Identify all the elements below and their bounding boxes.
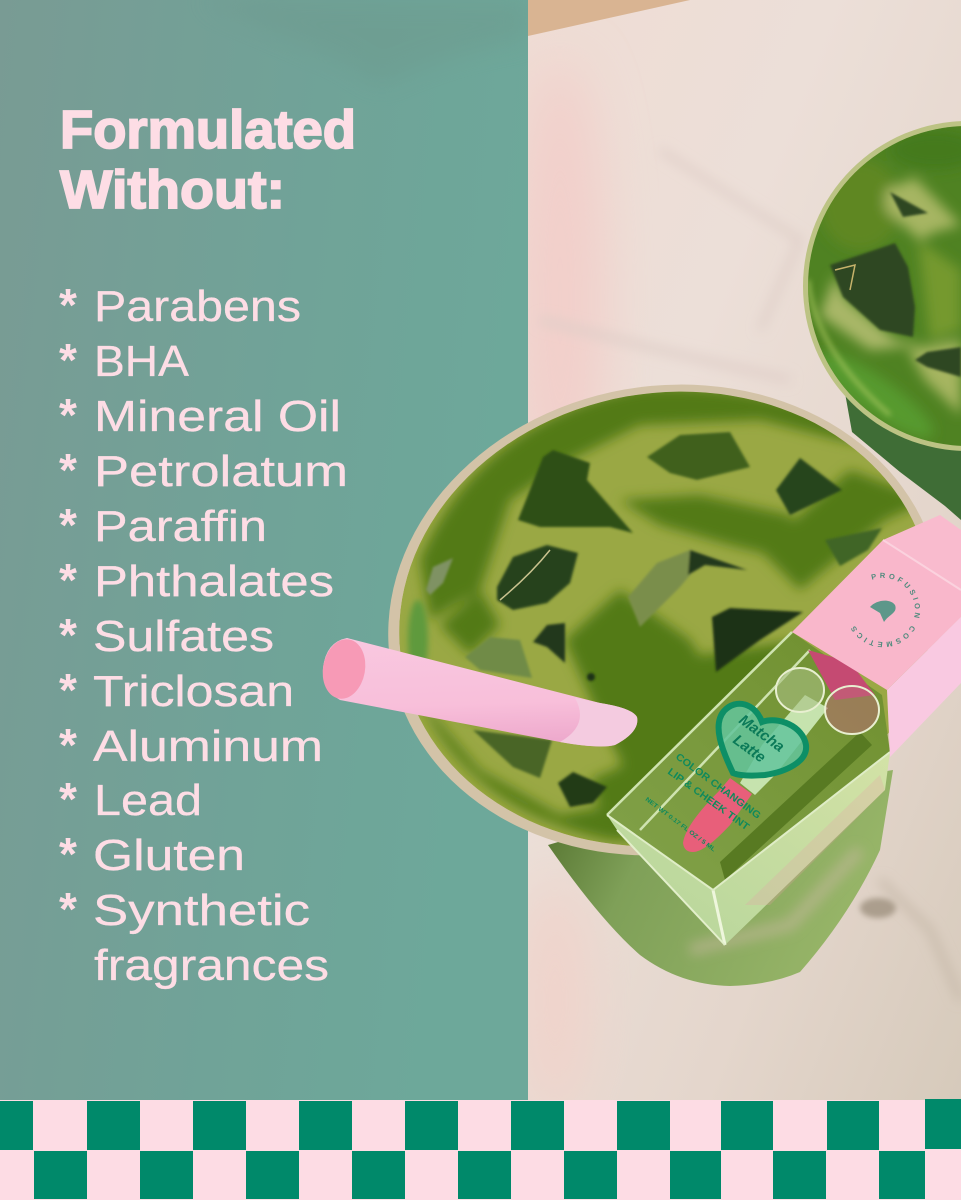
second cup rim <box>803 121 961 451</box>
product label text: LIP & CHEEK TINT <box>665 767 751 833</box>
list asterisks: * <box>59 609 77 661</box>
lip tint product <box>606 515 961 946</box>
ingredient list: Gluten <box>93 831 245 880</box>
photo: main matcha cup <box>388 384 928 986</box>
list asterisks: * <box>59 499 77 551</box>
photo: second matcha cup <box>803 121 961 520</box>
list asterisks <box>59 279 77 935</box>
cup body <box>548 770 893 986</box>
list asterisks: * <box>59 883 77 935</box>
left teal panel <box>0 0 528 1100</box>
list asterisks: * <box>59 554 77 606</box>
ingredient list: Lead <box>94 776 202 825</box>
ingredient list: Synthetic <box>93 886 310 935</box>
heart logo: Matcha <box>736 711 787 756</box>
heading <box>60 100 356 220</box>
list asterisks: * <box>59 334 77 386</box>
ingredient list: fragrances <box>94 941 329 990</box>
product label text: NET WT 0.17 FL OZ / 5 ML <box>644 797 716 854</box>
list asterisks: * <box>59 719 77 771</box>
heart logo <box>719 704 806 776</box>
second cup body <box>845 393 961 520</box>
marble table background photo <box>515 0 961 1120</box>
list asterisks: * <box>59 444 77 496</box>
wand <box>808 650 875 700</box>
glass tube <box>607 752 890 945</box>
product label text <box>644 752 763 854</box>
matcha surface <box>399 392 928 846</box>
heading: Without: <box>60 160 285 220</box>
list asterisks: * <box>59 664 77 716</box>
list asterisks: * <box>59 828 77 880</box>
list asterisks: * <box>59 389 77 441</box>
ingredient list: Aluminum <box>93 722 323 771</box>
cap badge: PROFUSION COSMETICS <box>851 572 920 648</box>
ingredient list: Phthalates <box>94 557 334 606</box>
ingredient list <box>93 282 348 990</box>
ingredient list: BHA <box>94 337 190 386</box>
cup rim <box>351 341 961 899</box>
pink straw <box>318 636 637 746</box>
ingredient list: Paraffin <box>94 502 267 551</box>
ingredient list: Petrolatum <box>94 447 348 496</box>
heading: Formulated <box>60 100 356 160</box>
ingredient list: Triclosan <box>93 667 294 716</box>
list asterisks: * <box>59 279 77 331</box>
ingredient list: Sulfates <box>93 612 274 661</box>
ice cubes in main cup <box>426 432 882 807</box>
heart logo: Latte <box>730 731 769 766</box>
cap <box>883 515 961 590</box>
list asterisks: * <box>59 773 77 825</box>
bubbles <box>776 668 824 712</box>
product label text: COLOR CHANGING <box>673 752 763 822</box>
ingredient list: Mineral Oil <box>94 392 341 441</box>
ice cubes in second cup <box>830 192 961 377</box>
ingredient list: Parabens <box>94 282 301 331</box>
checkerboard border <box>0 1099 961 1200</box>
